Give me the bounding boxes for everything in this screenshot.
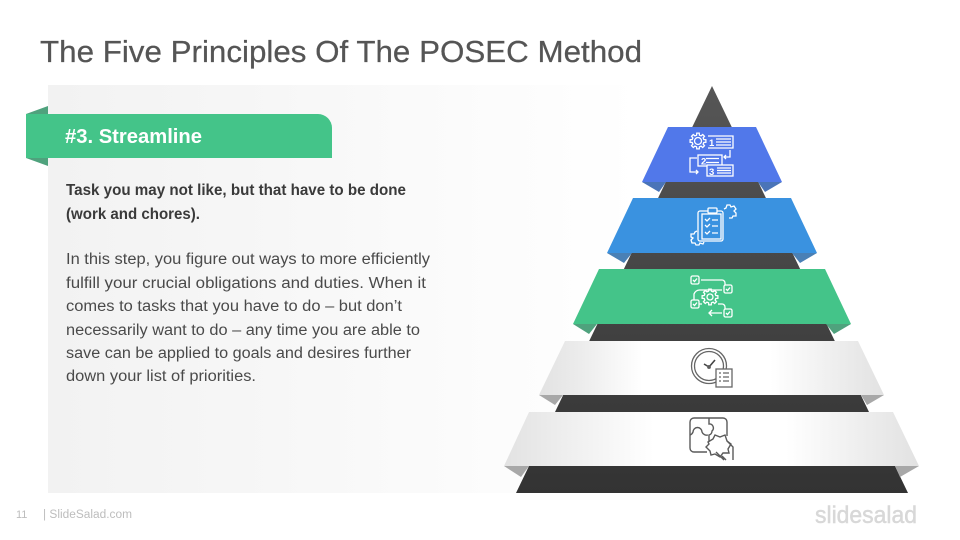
band 2: light blue (607, 198, 817, 263)
icon: gear and numbered steps (690, 133, 733, 178)
band 3: green (573, 269, 851, 334)
body text: In this step, you figure out ways to more efficiently (66, 251, 430, 268)
heading ribbon: #3. Streamline (65, 126, 202, 148)
icon: gear and numbered steps: 1 (709, 138, 715, 149)
band 1: blue (642, 127, 782, 192)
pyramid (504, 86, 919, 493)
heading ribbon (26, 106, 332, 166)
bold lead text (66, 182, 406, 223)
band 5: white (504, 412, 919, 477)
icon: gear and numbered steps: 2 (701, 156, 706, 168)
body text (66, 251, 430, 385)
bold lead text: Task you may not like, but that have to be done (66, 182, 406, 199)
band 4: white (539, 341, 884, 405)
body text: save can be applied to goals and desires further (66, 345, 411, 362)
body text: necessarily want to do – any time you are able to (66, 322, 420, 339)
icon: clock and list (692, 348, 732, 387)
body text: comes to tasks that you have to do – but don’t (66, 298, 403, 315)
panel: description background (48, 85, 640, 493)
body text: down your list of priorities. (66, 368, 256, 385)
title: The Five Principles Of The POSEC Method (40, 34, 642, 69)
footer: page number: 11 (16, 509, 27, 521)
icon: gear and numbered steps: 3 (709, 167, 714, 178)
icon: puzzle and hand (690, 418, 733, 460)
body text: fulfill your crucial obligations and duties. When it (66, 275, 427, 292)
pyramid dark core (516, 86, 908, 493)
icon: workflow gear (691, 276, 732, 317)
logo: slidesalad (815, 502, 917, 529)
footer: site name: | SlideSalad.com (43, 509, 132, 521)
bold lead text: (work and chores). (66, 206, 200, 223)
icon: clipboard checklist (691, 205, 736, 245)
